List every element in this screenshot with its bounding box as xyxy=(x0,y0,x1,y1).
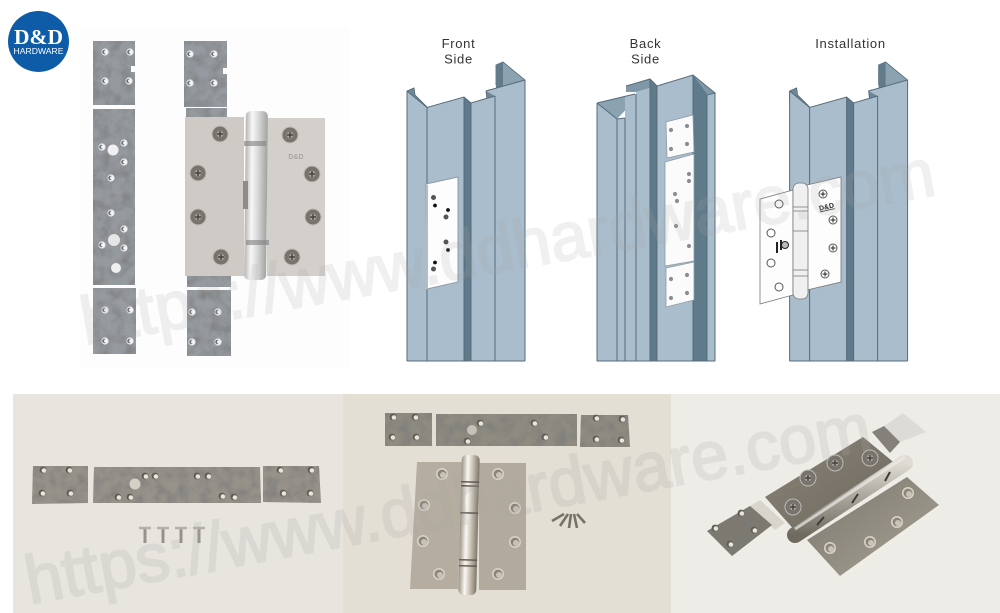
plate pieces xyxy=(665,115,694,307)
plate: strip behind hinge xyxy=(184,41,231,356)
installed hinge: D&D xyxy=(818,202,835,213)
screws xyxy=(552,514,585,528)
plate ends xyxy=(884,413,926,442)
hinge xyxy=(185,111,325,280)
logo: D&D Hardware: D&D xyxy=(14,25,63,49)
plate through the front face xyxy=(426,177,458,289)
hinge: D&D xyxy=(288,154,304,161)
photo: reinforcement plate and hinge xyxy=(79,27,350,367)
photo panel: plate and screws xyxy=(13,394,343,613)
plate: separate strip xyxy=(93,41,136,354)
diagram: installation xyxy=(760,36,908,361)
heading: back side: Side xyxy=(631,52,660,66)
logo: D&D Hardware xyxy=(8,11,69,72)
heading: back side: Back xyxy=(630,36,661,51)
watermark: bottom: https://www.ddhardware.com xyxy=(19,389,877,613)
diagram: front side xyxy=(407,36,525,361)
photo panel: plate above hinge xyxy=(343,394,671,613)
installed hinge xyxy=(760,177,841,304)
metal plate xyxy=(385,413,630,447)
hinge photo xyxy=(410,455,526,595)
photo panel: hinge in perspective xyxy=(671,394,1000,613)
heading: front side: Front xyxy=(442,36,475,51)
heading: front side: Side xyxy=(444,52,473,66)
column seen from behind xyxy=(597,75,715,361)
metal plate xyxy=(32,466,321,504)
background xyxy=(0,0,1000,394)
diagram: back side xyxy=(597,36,715,361)
heading: installation: Installation xyxy=(815,36,886,51)
hinge xyxy=(765,437,941,581)
logo: D&D Hardware: HARDWARE xyxy=(14,47,64,56)
screws xyxy=(139,528,205,543)
watermark: top: https://www.ddhardware.com xyxy=(74,135,940,360)
